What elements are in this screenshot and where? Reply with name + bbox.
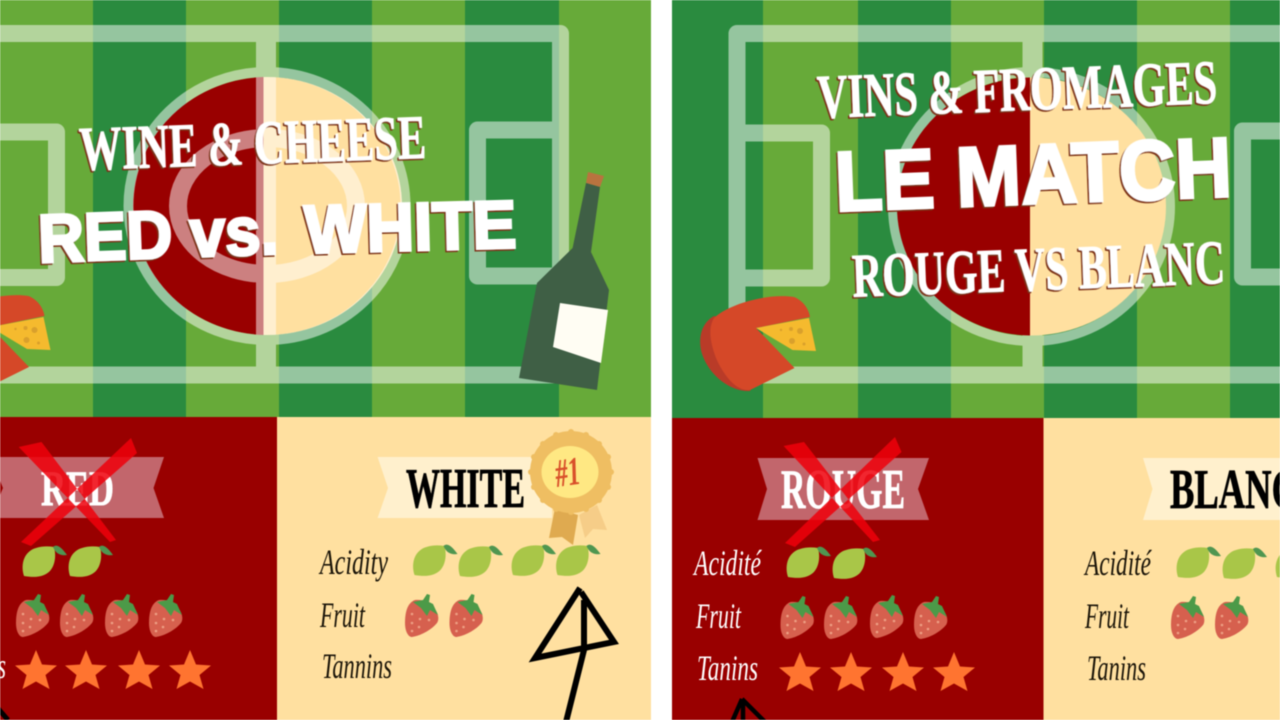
tannins label: Tanins (697, 648, 758, 688)
ribbon: White: WHITE (406, 458, 525, 520)
arrow: hand-drawn up arrow (732, 699, 765, 720)
medal badge (528, 429, 614, 545)
acidity rating (787, 547, 877, 579)
arrow: hand-drawn up arrow (535, 588, 614, 720)
panel: English infographic (0, 0, 651, 720)
acidity rating (413, 545, 600, 577)
red cross (19, 438, 137, 546)
title: White: WHITE (303, 186, 517, 268)
red cross (784, 437, 902, 547)
ribbon: Rouge (758, 458, 929, 521)
ribbon: Red: RED (41, 460, 114, 516)
ribbon: Rouge: ROUGE (781, 459, 905, 521)
title: Le Match: LE MATCH (833, 120, 1233, 229)
title: Red vs.: RED vs. (37, 193, 279, 277)
panel: rouge (672, 418, 1044, 720)
pitch markings (737, 33, 1280, 376)
red and white centre circle (133, 77, 402, 335)
ribbon: Red (0, 457, 164, 518)
football pitch background (0, 0, 651, 417)
fruit label: Fruit (319, 595, 366, 635)
icon: cheese wheel (700, 296, 816, 391)
acidity label: Acidity (319, 542, 388, 582)
acidity rating (1177, 547, 1280, 579)
ribbon: White (378, 457, 552, 520)
acidity label: Acidité (1084, 543, 1152, 583)
panel: French infographic (672, 0, 1280, 720)
title: Wine & Cheese: WINE & CHEESE (78, 104, 427, 184)
fruit rating (16, 594, 182, 637)
fruit rating (405, 594, 483, 637)
icon: cheese wheel (0, 295, 50, 390)
fruit label: Fruit (695, 596, 742, 636)
tannins label: Tannins (322, 646, 392, 686)
acidity label: Acidité (693, 543, 762, 583)
panel: red wine (0, 417, 277, 720)
tannin rating (15, 650, 211, 689)
football pitch background (672, 0, 1280, 418)
panel: white wine (277, 417, 651, 720)
panel: blanc (1044, 418, 1280, 720)
tannins label: Tanins (1087, 648, 1146, 688)
tannins rating (779, 652, 975, 691)
fruit rating (780, 595, 947, 639)
icon: wine bottle (519, 172, 609, 390)
fruit label: Fruit (1084, 596, 1130, 636)
acidity rating (23, 546, 113, 577)
fruit rating (1171, 596, 1248, 639)
pitch markings (0, 33, 560, 376)
medal badge: #1 (551, 448, 583, 496)
red and white centre circle (897, 78, 1166, 336)
arrow corner (0, 704, 8, 720)
